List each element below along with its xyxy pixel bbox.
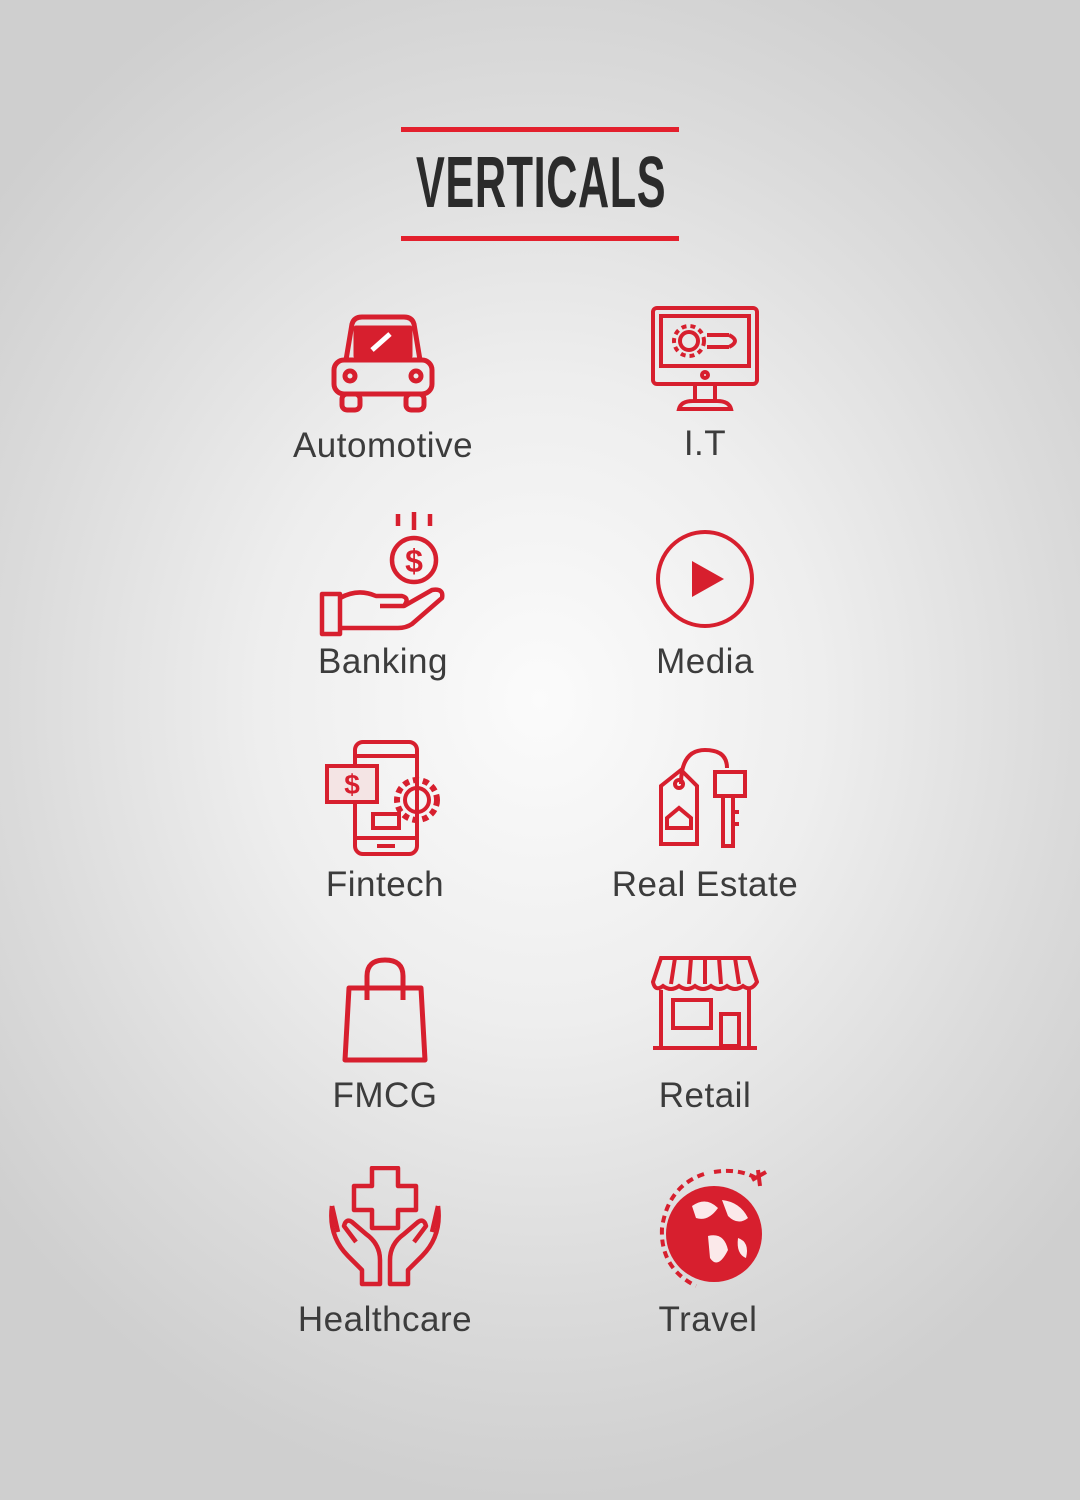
item: Retail (651, 956, 759, 1115)
item: FMCG (332, 958, 438, 1115)
icon: hand with coin: $ (405, 543, 423, 579)
item: Media (656, 530, 754, 681)
label: Travel (659, 1300, 757, 1339)
item: Healthcare (298, 1166, 472, 1339)
icon: phone with money and gear: $ (344, 769, 360, 800)
icon: tag and key (659, 748, 747, 848)
label: Banking (318, 642, 448, 681)
icon: hand with coin (320, 512, 445, 636)
title: VERTICALS (416, 143, 666, 223)
item: Real Estate (612, 748, 798, 904)
icon: play button (656, 530, 754, 628)
label: Healthcare (298, 1300, 472, 1339)
icon: globe with plane (660, 1168, 767, 1288)
label: Retail (659, 1076, 751, 1115)
icon: monitor (651, 306, 759, 411)
icon: shopping bag (342, 958, 428, 1062)
item: Travel (659, 1168, 767, 1339)
label: Automotive (293, 426, 473, 465)
label: Real Estate (612, 865, 798, 904)
icon: hands with cross (329, 1166, 441, 1286)
icon: store (651, 956, 759, 1050)
item: Fintech (325, 740, 444, 904)
label: Media (656, 642, 754, 681)
decorative line top (401, 127, 679, 132)
label: FMCG (332, 1076, 438, 1115)
item: IT (651, 306, 759, 463)
decorative line bottom (401, 236, 679, 241)
item: Automotive (293, 314, 473, 465)
icon: phone with money and gear (325, 740, 440, 856)
item: Banking (318, 512, 448, 681)
label: Fintech (326, 865, 444, 904)
icon: car (332, 314, 434, 412)
label: I.T (684, 424, 726, 463)
